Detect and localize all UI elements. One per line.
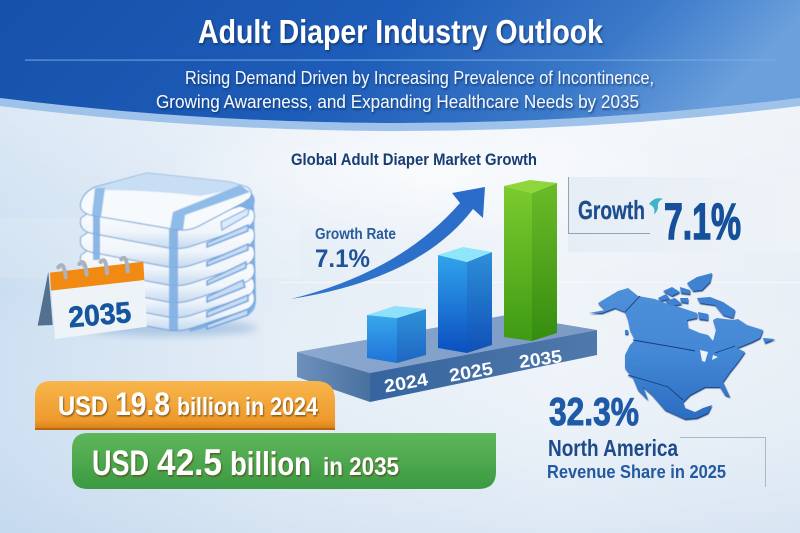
subtitle: Rising Demand Driven by Increasing Prevalence of Incontinence, xyxy=(185,67,654,88)
calendar rings xyxy=(58,258,128,277)
arctic islands xyxy=(625,273,775,343)
bar labels xyxy=(383,346,563,396)
subtitle: Growing Awareness, and Expanding Healthcare Needs by 2035 xyxy=(156,91,639,112)
callout: USD 42.5 billion: billion xyxy=(230,445,311,482)
bar 2025 xyxy=(438,247,492,353)
growth label: Growth xyxy=(578,195,645,225)
growth rate callout: 7.1% xyxy=(315,245,370,273)
calendar year: 2035 xyxy=(67,296,132,334)
chart heading: Global Adult Diaper Market Growth xyxy=(291,150,537,169)
title: Adult Diaper Industry Outlook xyxy=(198,13,604,50)
subtitle xyxy=(156,67,654,112)
borders xyxy=(625,296,735,400)
header banner xyxy=(0,0,800,131)
stacked diapers xyxy=(80,190,256,332)
region name: North America xyxy=(548,435,678,461)
growth arrow xyxy=(291,187,485,299)
growth rate callout xyxy=(315,226,396,273)
icon: teal drop xyxy=(649,198,663,214)
callout: USD 19.8 billion xyxy=(35,381,335,430)
great lakes xyxy=(700,350,718,362)
map: North America xyxy=(589,273,775,419)
icon: calendar 2035 xyxy=(38,258,147,339)
panel: growth 7.1% xyxy=(568,177,800,252)
bar 2035 xyxy=(504,180,557,341)
icon: diaper stack xyxy=(80,173,258,336)
callout: USD 19.8 billion: USD xyxy=(58,391,108,421)
callout: USD 19.8 billion: 19.8 xyxy=(115,386,170,422)
bar labels: 2035 xyxy=(518,346,563,372)
mainland xyxy=(589,288,763,419)
callout: USD 42.5 billion: USD xyxy=(92,444,149,483)
platform xyxy=(297,315,597,402)
callout: USD 19.8 billion: billion xyxy=(177,393,240,421)
bar labels: 2025 xyxy=(448,358,494,386)
growth rate callout: Growth Rate xyxy=(315,226,396,243)
growth value: 7.1% xyxy=(664,193,741,250)
bar labels: 2024 xyxy=(383,369,429,396)
bar 2024 xyxy=(367,306,426,363)
share value: 32.3% xyxy=(549,391,639,434)
callout: USD 42.5 billion: 42.5 xyxy=(157,442,222,483)
callout: USD 42.5 billion: in 2035 xyxy=(323,453,399,481)
callout: USD 19.8 billion: in 2024 xyxy=(245,393,318,421)
bar chart xyxy=(297,180,597,402)
stat: North America share xyxy=(547,391,766,487)
callout: USD 42.5 billion xyxy=(72,433,496,489)
share caption: Revenue Share in 2025 xyxy=(547,462,726,482)
top diaper xyxy=(80,173,251,230)
